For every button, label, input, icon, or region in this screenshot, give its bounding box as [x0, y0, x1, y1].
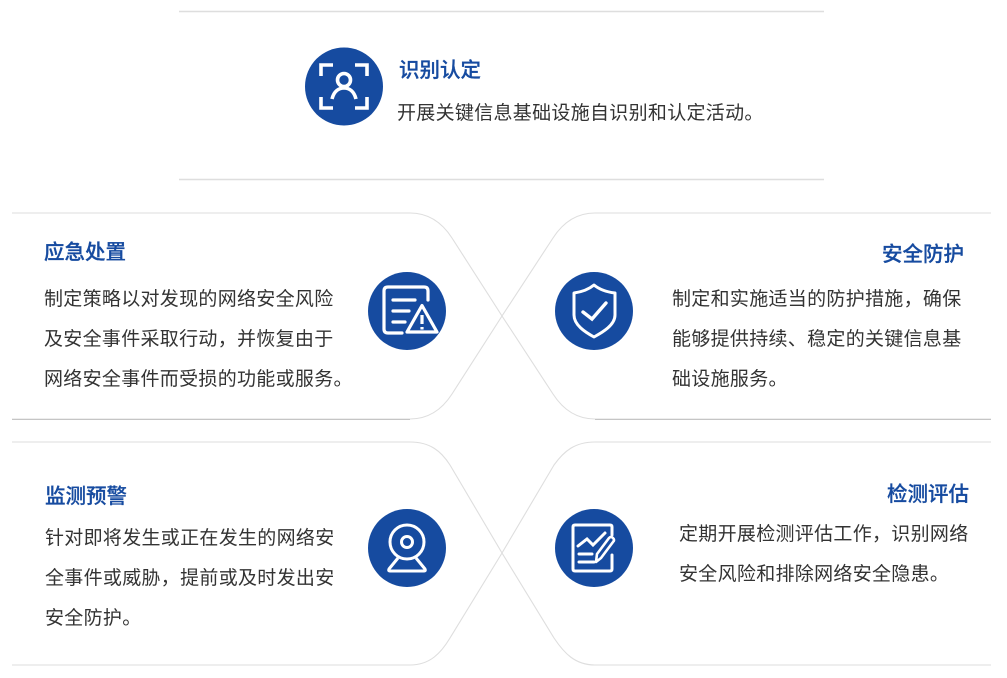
text: protection: 础设施服务。: [672, 369, 788, 390]
text: assessment: 安全风险和排除网络安全隐患。: [679, 564, 949, 585]
heading: monitoring: 监测预警: [45, 485, 127, 508]
heading: emergency: 应急处置: [44, 241, 126, 264]
text: protection: [672, 288, 962, 390]
text: emergency: 制定策略以对发现的网络安全风险: [44, 289, 334, 310]
icon: document warning: [368, 272, 446, 350]
text: monitoring: 全事件或威胁，提前或及时发出安: [45, 568, 335, 589]
text: monitoring: 针对即将发生或正在发生的网络安: [45, 528, 335, 549]
icon: identify person: [305, 48, 383, 126]
heading: protection: 安全防护: [882, 243, 964, 266]
heading: assessment: 检测评估: [887, 483, 969, 506]
icon: webcam: [368, 509, 446, 587]
icon: shield check: [555, 272, 633, 350]
text: assessment: [679, 524, 969, 585]
text: protection: 制定和实施适当的防护措施，确保: [672, 289, 962, 310]
icon: chart and pencil: [555, 509, 633, 587]
text: assessment: 定期开展检测评估工作，识别网络: [679, 524, 969, 545]
heading: identify: 识别认定: [399, 59, 481, 82]
text: monitoring: 安全防护。: [45, 608, 142, 629]
text: emergency: 及安全事件采取行动，并恢复由于: [44, 329, 334, 350]
text: identify: 开展关键信息基础设施自识别和认定活动。: [397, 103, 764, 124]
text: emergency: 网络安全事件而受损的功能或服务。: [44, 369, 353, 390]
text: emergency: [44, 288, 353, 390]
text: protection: 能够提供持续、稳定的关键信息基: [672, 329, 962, 350]
text: monitoring: [45, 528, 335, 629]
